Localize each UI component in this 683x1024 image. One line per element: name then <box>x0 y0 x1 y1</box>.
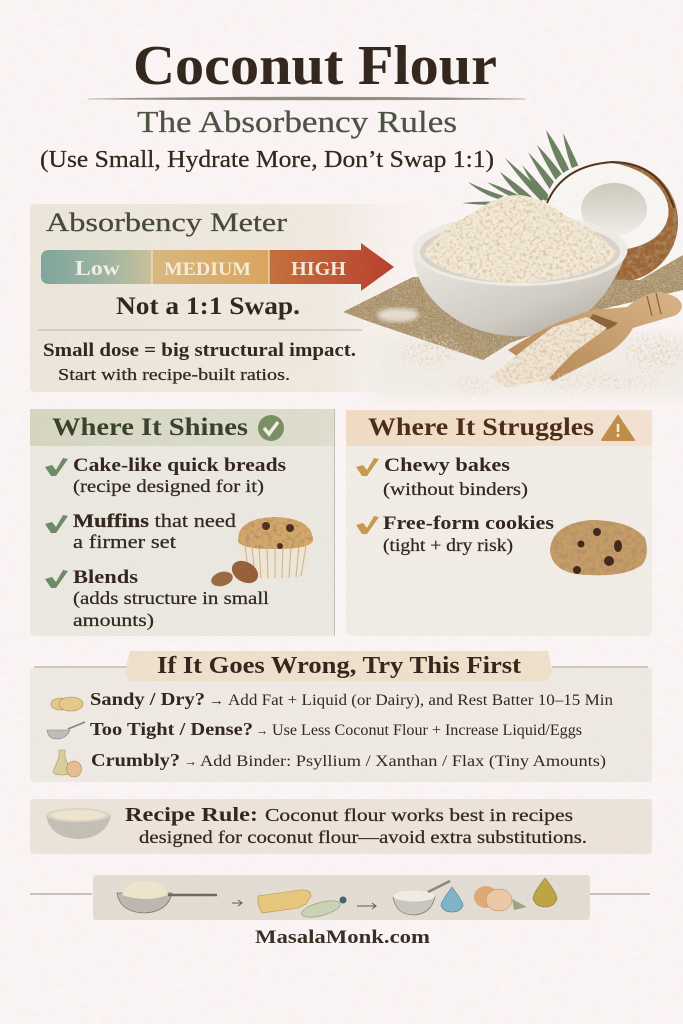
note line two: Start with recipe-built ratios. <box>58 365 290 384</box>
icon: water drop <box>441 887 463 912</box>
arrow <box>232 900 242 906</box>
footer illustration strip <box>30 875 650 920</box>
item: chewy bakes <box>356 455 528 500</box>
flour in scoop <box>490 317 607 388</box>
item: free-form cookies: Free-form cookies <box>383 513 554 534</box>
icon: butter <box>51 697 83 711</box>
item: muffins <box>45 511 237 553</box>
bowl <box>412 214 628 336</box>
tagline: (Use Small, Hydrate More, Don’t Swap 1:1) <box>40 147 494 173</box>
row: crumbly: → <box>184 753 197 769</box>
panel: where it struggles <box>346 410 652 636</box>
panel background <box>30 668 652 782</box>
panel background <box>30 204 440 392</box>
item: free-form cookies: (tight + dry risk) <box>383 535 513 556</box>
website credit: MasalaMonk.com <box>255 927 430 948</box>
row: crumbly: Add Binder: Psyllium / Xanthan / Flax (Tiny Amounts) <box>200 753 606 770</box>
icon: check badge <box>258 415 284 441</box>
icon: cookie <box>550 520 647 575</box>
icon: pan of flour <box>117 881 217 913</box>
item: blends: amounts) <box>73 610 154 631</box>
recipe rule text: designed for coconut flour—avoid extra substitutions. <box>139 827 587 847</box>
meter arrow: Low <box>75 256 121 280</box>
item: chewy bakes: Chewy bakes <box>384 455 510 476</box>
panel header band <box>30 409 335 446</box>
panel background <box>30 409 335 636</box>
panel: where it shines <box>30 409 335 636</box>
icon: warning triangle <box>602 416 634 440</box>
row: sandy or dry: Add Fat + Liquid (or Dairy), and Rest Batter 10–15 Min <box>228 692 613 709</box>
icon: bottle and egg <box>53 750 82 777</box>
burlap cloth <box>343 255 683 360</box>
table surface <box>375 335 683 397</box>
icon: butter and herb <box>258 890 346 920</box>
row: sandy or dry: → <box>209 692 224 709</box>
panel: absorbency meter <box>30 204 440 392</box>
panel heading: Where It Shines <box>52 414 248 441</box>
callout: not a swap: Not a 1:1 Swap. <box>116 293 300 320</box>
row: too tight or dense: → <box>256 722 268 738</box>
row: crumbly: Crumbly? <box>91 750 180 770</box>
row: too tight or dense: Too Tight / Dense? <box>90 719 253 739</box>
recipe rule text: Coconut flour works best in recipes <box>265 805 573 825</box>
wooden scoop <box>490 292 682 388</box>
icon: oil drop <box>533 878 557 907</box>
title underline <box>88 97 526 100</box>
coconut cavity <box>581 183 647 235</box>
item: chewy bakes: (without binders) <box>383 479 528 500</box>
icon: flour bowl <box>46 808 111 839</box>
panel heading: Absorbency Meter <box>46 208 287 237</box>
coconut flesh <box>540 153 676 259</box>
icon: eggs <box>474 886 527 911</box>
flour heap <box>423 195 617 283</box>
title: Coconut Flour <box>133 35 497 97</box>
item: blends: (adds structure in small <box>73 588 269 609</box>
heading: If It Goes Wrong, Try This First <box>157 653 521 679</box>
palm leaf <box>462 130 581 205</box>
panel: recipe rule <box>30 799 652 854</box>
meter arrow: MEDIUM <box>164 259 251 280</box>
panel header band <box>346 410 652 446</box>
row: too tight or dense <box>47 719 582 739</box>
flour scatter on table <box>400 334 683 391</box>
coconut <box>540 153 678 282</box>
item: blends: Blends <box>73 567 138 588</box>
illustration: coconut flour bowl <box>343 130 683 397</box>
panel background <box>30 799 652 854</box>
icon: ladle <box>47 722 85 739</box>
heading banner <box>125 651 552 681</box>
item: muffins: a firmer set <box>73 532 177 553</box>
recipe rule text <box>125 805 587 847</box>
panel background <box>346 410 652 636</box>
icon: bowl with spoon <box>393 881 450 915</box>
row: sandy or dry: Sandy / Dry? <box>90 689 205 709</box>
subtitle: The Absorbency Rules <box>137 104 457 139</box>
icon: muffin <box>210 517 313 589</box>
item: quick breads: (recipe designed for it) <box>73 476 264 497</box>
meter arrow <box>41 243 394 291</box>
coconut shell <box>558 162 678 282</box>
coconut rim <box>547 162 674 208</box>
item: blends <box>45 567 269 631</box>
recipe rule text: Recipe Rule: <box>125 805 258 826</box>
item: quick breads <box>45 455 286 497</box>
item: quick breads: Cake-like quick breads <box>73 455 286 476</box>
meter arrow: HIGH <box>291 258 346 280</box>
row: crumbly <box>53 750 606 777</box>
arrow <box>357 903 376 909</box>
item: free-form cookies <box>356 513 554 556</box>
panel heading: Where It Struggles <box>368 414 594 441</box>
row: too tight or dense: Use Less Coconut Flour + Increase Liquid/Eggs <box>272 722 582 739</box>
note line one: Small dose = big structural impact. <box>43 341 356 361</box>
item: muffins: Muffins that need <box>73 511 237 532</box>
panel: if it goes wrong <box>30 651 652 782</box>
row: sandy or dry <box>51 689 613 711</box>
